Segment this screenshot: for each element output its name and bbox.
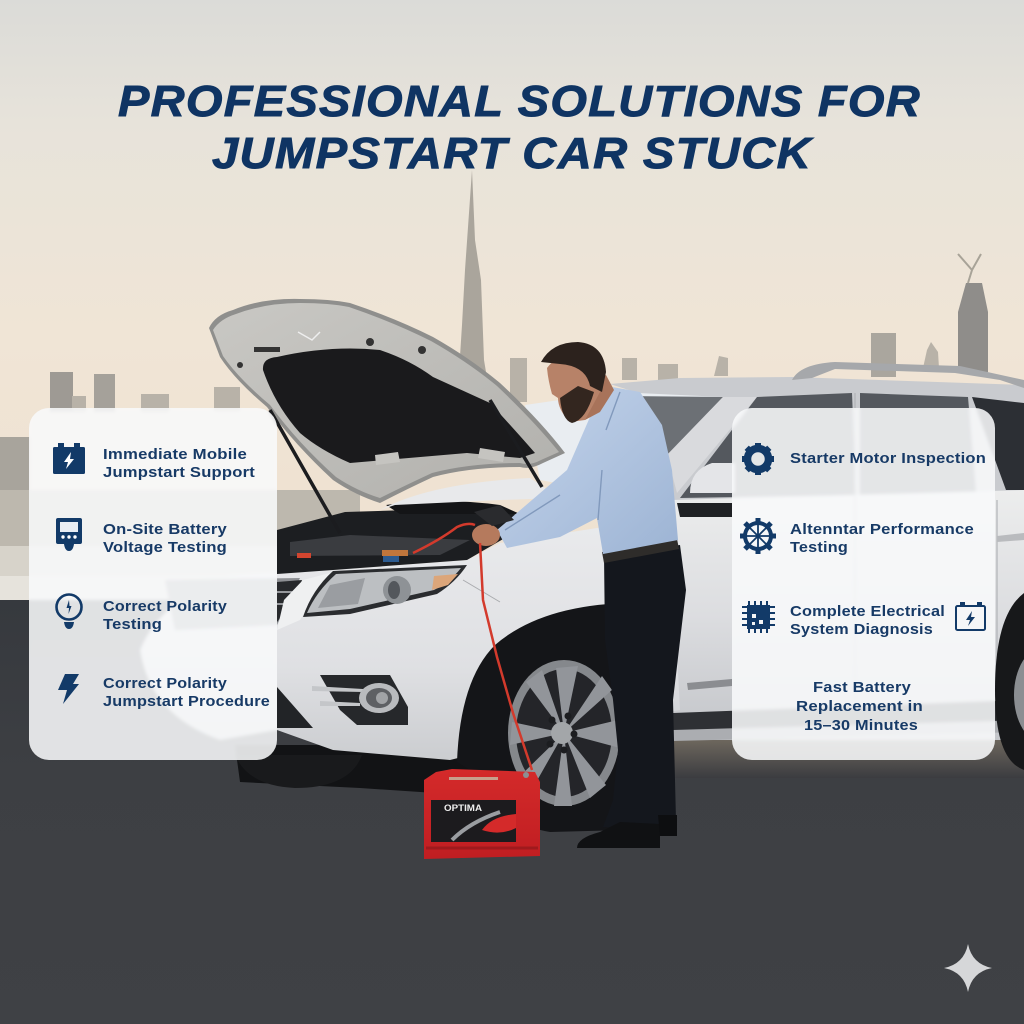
text: immediate mobile jumpstart support: Jumpstart Support [103,464,255,481]
text: correct polarity jumpstart procedure [103,675,270,710]
open hood [209,299,565,503]
car: roof rails [792,362,1024,388]
car battery: OPTIMA [444,803,483,813]
icon: gear [742,443,774,475]
front wheel [457,603,625,832]
shoes [577,822,660,848]
text: on-site battery voltage testing: Voltage Testing [103,539,227,556]
text: correct polarity jumpstart procedure: Jumpstart Procedure [103,693,270,710]
car: side windows [680,393,856,498]
car: front body [140,526,680,760]
skyline [0,170,988,493]
text: alternator performance testing: Altenntar Performance [790,521,974,538]
text: correct polarity testing: Testing [103,616,162,633]
sky [0,0,1024,610]
icon: alternator [740,518,776,554]
battery tester [474,505,514,526]
jumper cables [413,524,532,770]
engine bay [277,478,560,574]
panel: right services [732,408,995,760]
text: immediate mobile jumpstart support: Immediate Mobile [103,446,247,463]
title: JUMPSTART CAR STUCK [212,129,814,178]
car: door panels [672,490,1024,740]
car shadow [235,745,480,796]
panel: left services [29,408,277,760]
text: complete electrical system diagnosis: Complete Electrical [790,603,945,620]
icon: polarity gauge [56,594,82,629]
sparkle watermark [944,944,992,992]
text: complete electrical system diagnosis: System Diagnosis [790,621,933,638]
car: windshield [525,392,723,500]
neck and head [575,375,614,420]
shirt [497,387,678,554]
text: on-site battery voltage testing: On-Site Battery [103,521,227,538]
car: grille [165,578,302,630]
text: on-site battery voltage testing [103,521,227,556]
text: fast battery replacement: Replacement in [796,698,923,715]
car: a-pillar [667,397,757,493]
hand [472,524,500,546]
front left tyre [235,755,362,788]
barrier and road edge [0,490,360,548]
text: complete electrical system diagnosis [790,603,945,638]
car: roof [610,377,1024,510]
car: fog lamp bay [312,675,408,725]
text: fast battery replacement: Fast Battery [813,679,911,696]
text: fast battery replacement [796,679,923,734]
title: PROFESSIONAL SOLUTIONS FOR [118,77,921,126]
text: fast battery replacement: 15–30 Minutes [804,717,918,734]
text: correct polarity testing [103,598,227,633]
icon: circuit chip [742,601,775,633]
car: headlight washer and white lens trim [277,573,330,630]
car: headlight [303,565,467,617]
icon: battery outline [956,602,985,630]
car: lower grille [277,687,313,728]
asphalt [0,600,1024,1024]
trousers [603,545,686,830]
text: immediate mobile jumpstart support [103,446,255,481]
belt [602,539,679,563]
icon: battery [53,443,85,474]
icon: lightning bolt [58,674,79,704]
text: correct polarity testing: Correct Polarity [103,598,227,615]
mechanic [472,342,686,848]
title [118,77,921,178]
text: alternator performance testing: Testing [790,539,848,556]
text: correct polarity jumpstart procedure: Correct Polarity [103,675,227,692]
text: alternator performance testing [790,521,974,556]
text: starter motor inspection: Starter Motor Inspection [790,450,986,467]
car: rear wheel [995,593,1024,770]
icon: voltage meter [56,518,82,551]
hood struts [270,400,542,533]
car battery [424,769,540,859]
